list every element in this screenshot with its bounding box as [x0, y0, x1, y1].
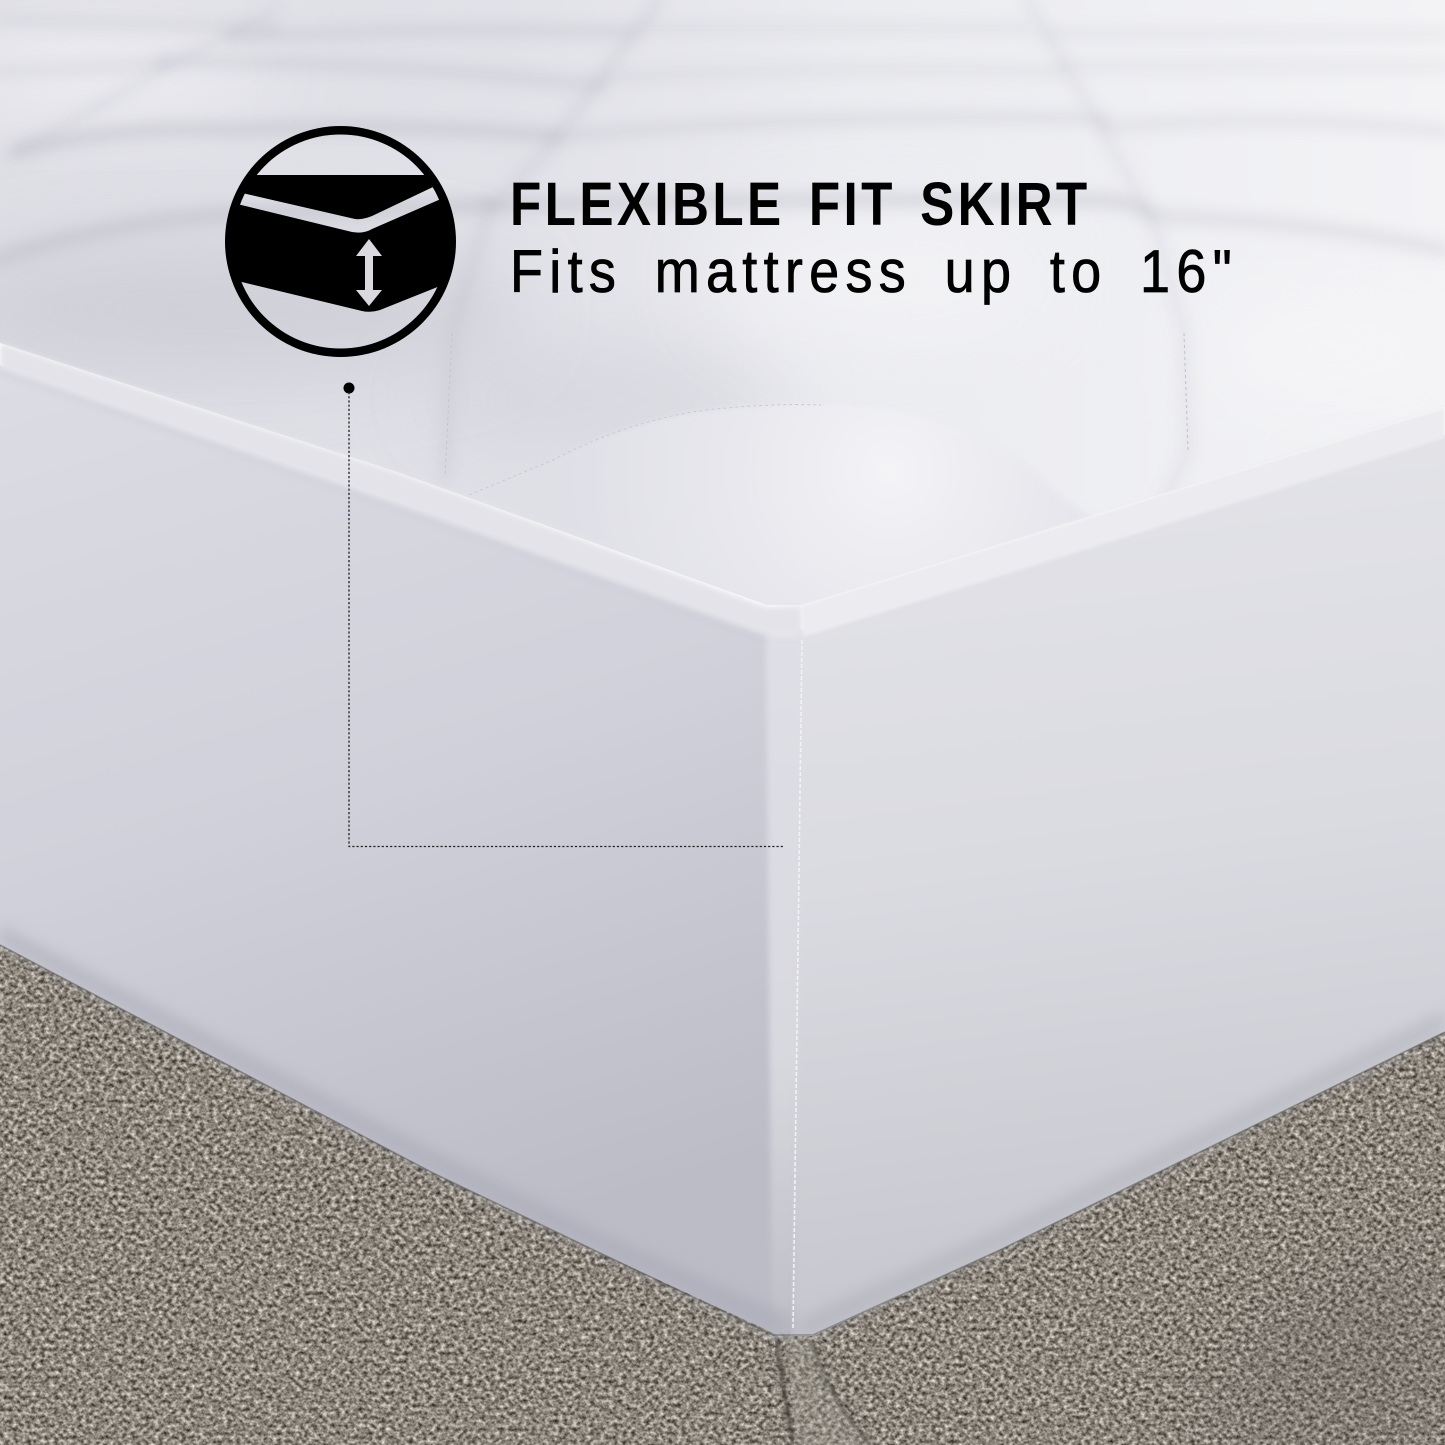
corner band beside seam: [766, 632, 803, 1336]
bottom shadows of skirt: [0, 925, 1445, 1336]
seam stitching: [445, 333, 452, 477]
corner seam stitching: [793, 640, 802, 1330]
icon: double-headed arrow: [356, 239, 382, 306]
corner pillow: [469, 404, 1080, 520]
piping cord at box spring corner: [776, 1338, 870, 1445]
piping around the top edge: [0, 343, 1445, 639]
right skirt panel: [790, 435, 1445, 1336]
quilting channel shadows: [0, 20, 1445, 258]
quilted top surface: [0, 0, 1445, 620]
callout leader line: [344, 382, 783, 846]
heading: FLEXIBLE FIT SKIRT: [510, 170, 1091, 238]
icon: skirt stretch badge: [225, 126, 456, 357]
left skirt panel: [0, 365, 780, 1336]
diagonal seams: [9, 0, 1188, 500]
subheading: Fits mattress up to 16": [510, 238, 1238, 306]
box spring fabric base: [0, 900, 1445, 1445]
